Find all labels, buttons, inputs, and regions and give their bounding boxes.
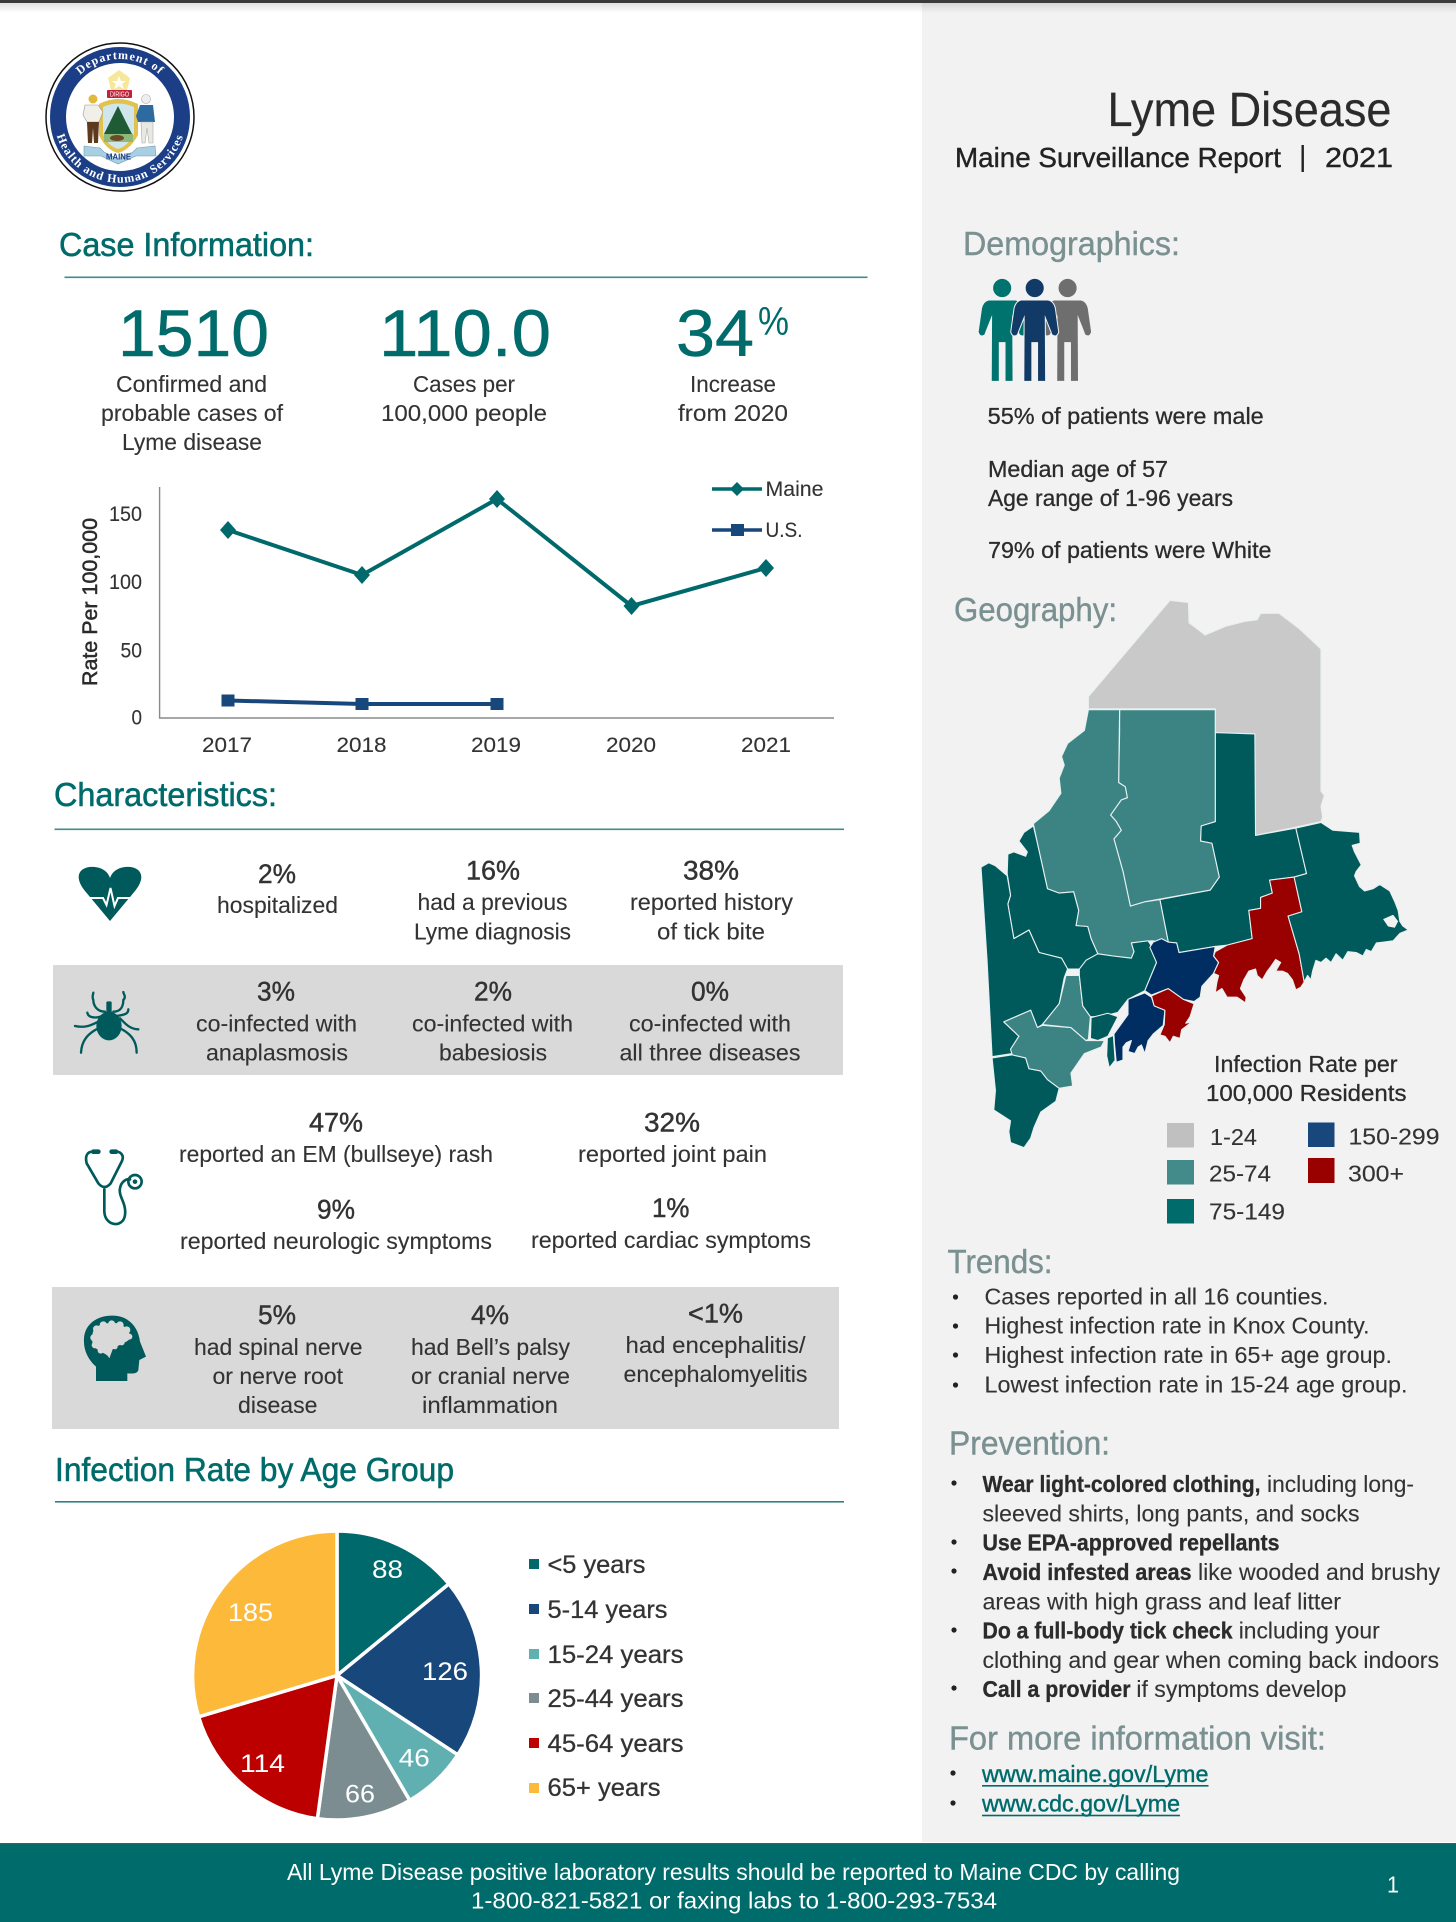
pie legend: 5-14 years <box>548 1596 668 1624</box>
row: neurologic conditions: disease <box>238 1392 318 1418</box>
row: severity: had a previous <box>418 889 568 915</box>
row: symptoms: 32% <box>644 1108 700 1138</box>
demographic facts: Median age of 57 <box>988 456 1168 482</box>
prevention list: Use EPA-approved repellants <box>982 1530 1280 1556</box>
map legend: 75-149 <box>1209 1198 1285 1224</box>
x axis labels: 2018 <box>336 734 386 757</box>
pie legend: 65+ years <box>548 1774 660 1802</box>
stat: 110.0 per 100,000: 100,000 people <box>381 400 547 426</box>
map legend <box>1167 1051 1440 1224</box>
chart legend <box>712 478 824 542</box>
footer: All Lyme Disease positive laboratory results should be reported to Maine CDC by calling <box>287 1859 1180 1885</box>
row: severity: Lyme diagnosis <box>414 918 571 944</box>
row: neurologic conditions: encephalomyelitis <box>624 1361 808 1387</box>
demographic facts: Age range of 1-96 years <box>988 485 1233 511</box>
row: neurologic conditions: had encephalitis/ <box>626 1332 806 1358</box>
county: Oxford <box>981 863 1068 1057</box>
x axis labels: 2019 <box>471 734 521 757</box>
row: neurologic conditions: or nerve root <box>212 1363 344 1389</box>
row: symptoms: reported an EM (bullseye) rash <box>179 1141 493 1167</box>
row: severity: 38% <box>683 856 739 886</box>
row: symptoms: 47% <box>309 1108 363 1138</box>
stat: 34% increase: 34 <box>676 296 754 370</box>
county: Hancock <box>1214 877 1304 1003</box>
map legend: 300+ <box>1348 1160 1404 1186</box>
row: severity: hospitalized <box>217 892 338 918</box>
prevention list: areas with high grass and leaf litter <box>982 1589 1341 1615</box>
stat: 1510 cases: Confirmed and <box>116 371 267 397</box>
pie value labels: 88 <box>372 1556 403 1584</box>
line chart: rate per 100,000 by year <box>79 478 834 757</box>
county: Waldo <box>1145 939 1219 1002</box>
prevention list: clothing and gear when coming back indoors <box>982 1647 1439 1673</box>
prevention list: Call a provider <box>982 1676 1131 1702</box>
panel: characteristics <box>52 776 844 1429</box>
logo: Maine Department of Health and Human Services seal: DIRIGO <box>110 92 129 98</box>
footer <box>0 1843 1456 1922</box>
heading: trends: Trends: <box>948 1243 1052 1280</box>
prevention list: sleeved shirts, long pants, and socks <box>982 1501 1360 1527</box>
county: Piscataquis <box>1111 710 1219 906</box>
heading: infection rate by age group: Infection Rate by Age Group <box>55 1451 454 1488</box>
county: Sagadahoc <box>1090 1013 1118 1041</box>
icon: stethoscope <box>86 1152 142 1224</box>
x axis labels: 2021 <box>741 734 791 757</box>
row: severity: reported history <box>630 889 793 915</box>
trends list: Highest infection rate in 65+ age group. <box>984 1342 1392 1368</box>
heading: characteristics: Characteristics: <box>54 776 277 813</box>
row: co-infection: co-infected with <box>196 1010 357 1036</box>
row: co-infection: 0% <box>691 977 729 1007</box>
title block: Lyme Disease <box>1108 84 1392 137</box>
pie legend <box>529 1551 684 1802</box>
prevention list: Avoid infested areas <box>982 1559 1192 1585</box>
demographic facts: 79% of patients were White <box>988 537 1272 563</box>
x axis labels: 2017 <box>202 734 252 757</box>
series: Maine <box>220 490 774 615</box>
chart legend: Maine <box>766 478 824 501</box>
stat: 34% increase: Increase <box>690 371 776 397</box>
x axis labels <box>202 734 791 757</box>
top edge bar <box>0 0 1456 13</box>
map legend: 1-24 <box>1210 1124 1257 1150</box>
row: neurologic conditions: 4% <box>471 1300 509 1330</box>
panel: more information <box>949 1720 1326 1817</box>
pie value labels: 46 <box>399 1744 430 1772</box>
stat: 1510 cases: 1510 <box>118 296 269 370</box>
county: Lincoln <box>1114 993 1165 1062</box>
stat: 110.0 per 100,000: Cases per <box>413 371 515 397</box>
panel: trends <box>948 1243 1408 1398</box>
pie value labels: 114 <box>240 1750 285 1778</box>
heading: prevention: Prevention: <box>949 1425 1110 1462</box>
row: symptoms: reported joint pain <box>578 1141 767 1167</box>
map legend title <box>1206 1051 1406 1106</box>
county: Cumberland <box>1004 1010 1105 1088</box>
prevention list <box>951 1471 1440 1702</box>
row: co-infection: anaplasmosis <box>206 1040 348 1066</box>
y axis labels: 100 <box>109 571 142 594</box>
stat: 1510 cases: Lyme disease <box>122 429 262 455</box>
trends list <box>953 1284 1408 1398</box>
stat: 110.0 per 100,000: 110.0 <box>379 296 551 370</box>
pie value labels: 66 <box>345 1780 375 1808</box>
links list: www.maine.gov/Lyme <box>981 1761 1208 1787</box>
county: Franklin <box>1007 826 1098 969</box>
row: co-infection <box>53 965 843 1075</box>
page number: 1 <box>1387 1872 1399 1898</box>
row: co-infection: babesiosis <box>439 1040 547 1066</box>
demographic facts <box>988 403 1272 563</box>
row: neurologic conditions: or cranial nerve <box>411 1363 570 1389</box>
stat: 110.0 per 100,000 <box>379 296 551 426</box>
row: neurologic conditions: <1% <box>688 1298 743 1328</box>
panel: infection rate by age group <box>55 1451 844 1820</box>
icon: heart with pulse <box>79 867 141 921</box>
row: co-infection: 2% <box>474 977 512 1007</box>
row: co-infection: co-infected with <box>412 1010 573 1036</box>
pie legend: 15-24 years <box>548 1641 684 1669</box>
row: neurologic conditions: had spinal nerve <box>194 1334 362 1360</box>
logo: Maine Department of Health and Human Services seal: MAINE <box>106 152 132 162</box>
footer: 1-800-821-5821 or faxing labs to 1-800-293-7534 <box>471 1888 997 1914</box>
prevention list: if symptoms develop <box>1136 1676 1346 1702</box>
row: neurologic conditions <box>52 1287 839 1429</box>
county: Somerset <box>1033 710 1168 958</box>
logo: Maine Department of Health and Human Services seal: Health and Human Services <box>56 133 182 183</box>
map legend: 25-74 <box>1209 1160 1271 1186</box>
series: U.S. <box>222 694 504 710</box>
row: neurologic conditions: inflammation <box>422 1392 558 1418</box>
county: Androscoggin <box>1042 976 1090 1041</box>
row: symptoms: 1% <box>652 1193 690 1223</box>
row: severity: 16% <box>466 856 520 886</box>
row: co-infection: co-infected with <box>629 1010 791 1036</box>
coastal inlet: Washington <box>1383 915 1398 928</box>
panel: geography <box>954 591 1440 1224</box>
pie legend: <5 years <box>548 1551 646 1579</box>
pie chart <box>193 1531 482 1820</box>
prevention list: Do a full-body tick check <box>982 1618 1233 1644</box>
links list <box>950 1761 1208 1817</box>
row: symptoms: 9% <box>317 1194 355 1224</box>
trends list: Cases reported in all 16 counties. <box>984 1284 1328 1310</box>
heading: demographics: Demographics: <box>963 225 1180 262</box>
y axis labels: 150 <box>109 503 142 526</box>
map: Maine counties by infection rate <box>981 600 1408 1148</box>
x axis labels: 2020 <box>606 734 656 757</box>
heading: for more information: For more information visit: <box>949 1720 1326 1757</box>
panel: case information <box>59 226 868 455</box>
demographic facts: 55% of patients were male <box>988 403 1264 429</box>
stat: 1510 cases <box>101 296 284 455</box>
title block <box>955 84 1393 173</box>
y axis labels: 50 <box>120 640 142 662</box>
county: Aroostook <box>1088 600 1324 835</box>
row: neurologic conditions: had Bell’s palsy <box>411 1334 570 1360</box>
heading: case information: Case Information: <box>59 226 314 263</box>
row: neurologic conditions: 5% <box>258 1300 296 1330</box>
chart legend: U.S. <box>766 519 802 542</box>
row: severity: of tick bite <box>657 918 765 944</box>
pie legend: 45-64 years <box>548 1730 684 1758</box>
icon: tick <box>75 992 138 1053</box>
title block: 2021 <box>1325 142 1393 173</box>
row: severity <box>79 856 793 944</box>
pie legend: 25-44 years <box>548 1685 684 1713</box>
row: co-infection: 3% <box>257 977 295 1007</box>
links list: www.cdc.gov/Lyme <box>981 1791 1180 1817</box>
icon: three people <box>979 279 1091 381</box>
icon: head with brain <box>84 1316 146 1381</box>
trends list: Lowest infection rate in 15-24 age group. <box>984 1372 1408 1398</box>
county: Knox <box>1151 989 1194 1043</box>
map legend: 150-299 <box>1348 1124 1440 1150</box>
row: symptoms: reported cardiac symptoms <box>531 1227 811 1253</box>
row: co-infection: all three diseases <box>620 1040 800 1066</box>
prevention list: including long- <box>1267 1471 1414 1497</box>
y axis labels <box>109 503 142 730</box>
prevention list: Wear light-colored clothing, <box>982 1471 1260 1497</box>
y axis labels: 0 <box>132 706 142 730</box>
stat: 34% increase: % <box>758 300 789 344</box>
stat: 1510 cases: probable cases of <box>101 400 284 426</box>
pie value labels: 185 <box>228 1599 273 1627</box>
panel: prevention <box>949 1425 1440 1702</box>
row: severity: 2% <box>258 859 296 889</box>
heading: geography: Geography: <box>954 591 1117 628</box>
panel: right sidebar background <box>922 0 1456 1842</box>
title block: Maine Surveillance Report <box>955 142 1281 173</box>
pie value labels <box>228 1556 468 1808</box>
map legend title: Infection Rate per <box>1214 1051 1398 1077</box>
row: symptoms: reported neurologic symptoms <box>180 1228 492 1254</box>
logo: Maine Department of Health and Human Services seal: Department of <box>75 52 165 75</box>
pie value labels: 126 <box>422 1658 468 1686</box>
trends list: Highest infection rate in Knox County. <box>984 1313 1370 1339</box>
logo: Maine Department of Health and Human Services seal <box>45 42 195 192</box>
map legend title: 100,000 Residents <box>1206 1080 1406 1106</box>
county: Washington <box>1288 822 1408 982</box>
row: symptoms <box>86 1108 811 1254</box>
stat: 34% increase: from 2020 <box>678 400 788 426</box>
county: Sagadahoc coast <box>1107 1036 1115 1067</box>
panel: demographics <box>963 225 1272 563</box>
y axis title: Rate Per 100,000 <box>79 518 102 686</box>
county: Penobscot <box>1160 733 1307 953</box>
stat: 34% increase <box>676 296 789 426</box>
county: York <box>992 1055 1059 1148</box>
prevention list: like wooded and brushy <box>1198 1559 1440 1585</box>
prevention list: including your <box>1239 1618 1380 1644</box>
county: Kennebec <box>1079 941 1157 1017</box>
